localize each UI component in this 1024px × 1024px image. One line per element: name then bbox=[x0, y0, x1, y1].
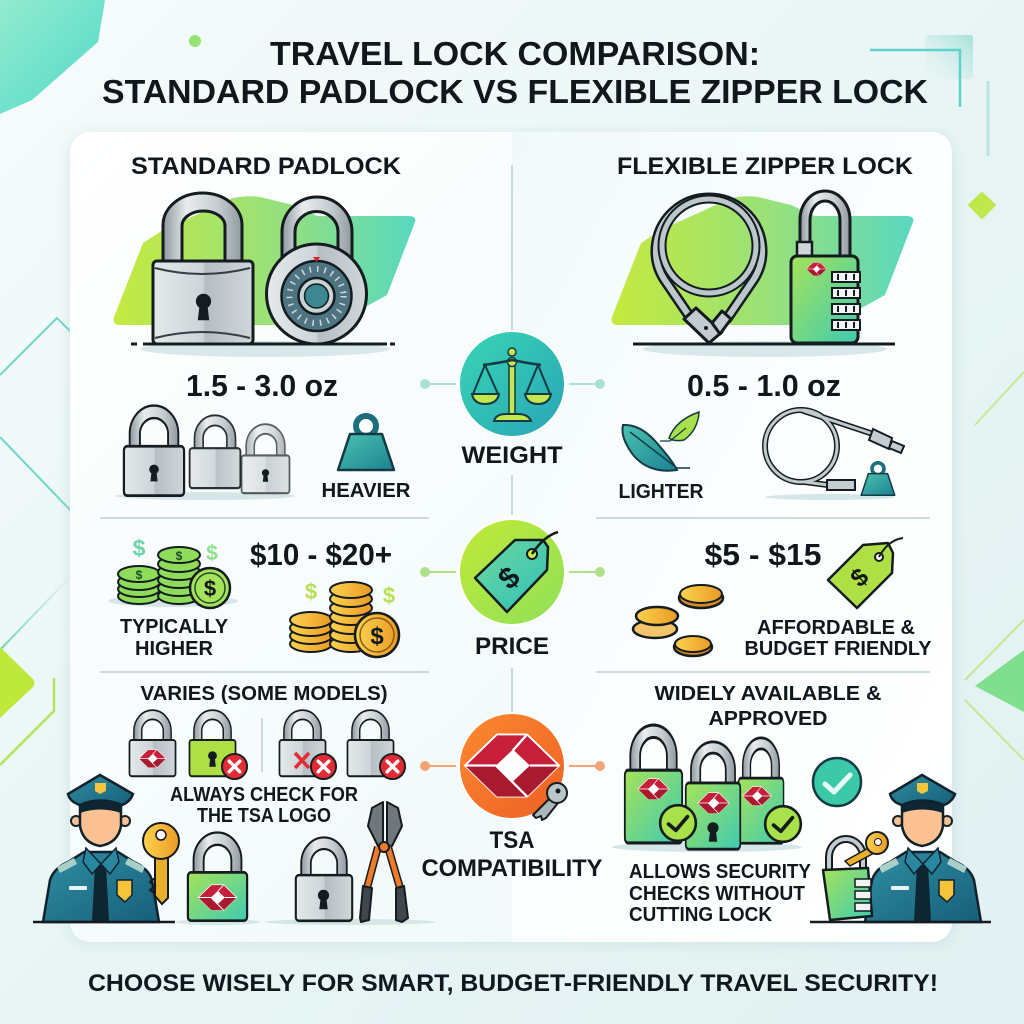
label: widely available and approved: WIDELY AVAILABLE & bbox=[654, 683, 882, 705]
title: STANDARD PADLOCK VS FLEXIBLE ZIPPER LOCK bbox=[102, 73, 928, 110]
icon: approved check bbox=[813, 758, 861, 806]
icon: gold coin stack: $ bbox=[383, 583, 395, 608]
title: TRAVEL LOCK COMPARISON: bbox=[270, 35, 760, 72]
icon: heavy weight bbox=[338, 416, 394, 470]
icon: group of heavy padlocks bbox=[115, 406, 295, 500]
label: heavier: HEAVIER bbox=[322, 480, 411, 502]
ground line right bbox=[810, 921, 991, 923]
text: allows security checks: ALLOWS SECURITY bbox=[629, 861, 812, 883]
label: widely available and approved: APPROVED bbox=[708, 708, 828, 730]
icon: bolt cutters bbox=[360, 802, 408, 922]
label: typically higher: HIGHER bbox=[135, 638, 214, 660]
label: affordable and budget friendly bbox=[744, 617, 932, 660]
icon: green money stack: $ bbox=[136, 568, 143, 582]
weight value: flexible: 0.5 - 1.0 oz bbox=[687, 368, 841, 403]
illustration: officer left bbox=[43, 775, 159, 922]
icon: green money stack: $ bbox=[206, 542, 218, 565]
icon: silver lock bbox=[265, 837, 435, 925]
text: always check for the TSA logo: ALWAYS CHECK FOR bbox=[170, 784, 359, 806]
label: TSA compatibility bbox=[422, 827, 602, 882]
text: allows security checks: CHECKS WITHOUT bbox=[629, 883, 805, 905]
icon: feather and leaf bbox=[622, 412, 699, 471]
label: typically higher bbox=[120, 616, 229, 660]
icon: green money stack: $ bbox=[176, 549, 183, 563]
price value: standard: $10 - $20+ bbox=[250, 537, 392, 572]
connector: TSA bbox=[420, 761, 605, 771]
connector: weight bbox=[420, 379, 605, 389]
icon: weight scale badge bbox=[459, 331, 565, 437]
icon: green price tag: $ bbox=[845, 563, 874, 593]
label: widely available and approved bbox=[654, 683, 882, 730]
icon: TSA logo badge bbox=[459, 713, 567, 820]
text: always check for the TSA logo: THE TSA LOGO bbox=[197, 805, 331, 827]
label: affordable and budget friendly: AFFORDABLE & bbox=[757, 617, 915, 639]
icons: TSA approved locks bbox=[612, 725, 802, 852]
illustration: cable lock and combination lock bbox=[612, 191, 913, 357]
icon: green money stack: $ bbox=[204, 576, 216, 601]
icon: gold key bbox=[143, 823, 179, 904]
icon: TSA green lock bbox=[176, 833, 260, 925]
panel: comparison card bbox=[68, 132, 954, 944]
text: allows security checks bbox=[629, 861, 812, 926]
icon: green price tag bbox=[828, 538, 903, 608]
icon: green money stack bbox=[108, 535, 238, 608]
label: varies: VARIES (SOME MODELS) bbox=[140, 683, 388, 705]
illustration: officer right bbox=[865, 775, 981, 922]
icon: combination lock with key bbox=[823, 832, 888, 920]
icons: locks without TSA approval bbox=[129, 710, 405, 779]
text: always check for the TSA logo bbox=[170, 784, 359, 827]
icon: price tag badge bbox=[459, 519, 565, 625]
title bbox=[102, 35, 928, 110]
price value: flexible: $5 - $15 bbox=[704, 537, 822, 572]
label: weight: WEIGHT bbox=[462, 442, 563, 469]
icon: price tag badge: $ bbox=[492, 560, 527, 596]
label: lighter: LIGHTER bbox=[618, 481, 704, 503]
label: price: PRICE bbox=[475, 633, 549, 660]
decorative corner and edge shapes bbox=[0, 0, 1024, 765]
illustration: standard padlocks bbox=[114, 193, 415, 357]
label: typically higher: TYPICALLY bbox=[120, 616, 229, 638]
label: TSA compatibility: TSA bbox=[490, 827, 534, 854]
label: TSA compatibility: COMPATIBILITY bbox=[422, 855, 602, 882]
weight value: standard: 1.5 - 3.0 oz bbox=[186, 368, 338, 403]
text: allows security checks: CUTTING LOCK bbox=[629, 904, 773, 926]
icon: gold coin stack bbox=[290, 579, 399, 657]
icon: gold coin stack: $ bbox=[370, 623, 384, 650]
footer tagline: CHOOSE WISELY FOR SMART, BUDGET-FRIENDLY TRAVEL SECURITY! bbox=[88, 970, 938, 997]
connector: price bbox=[420, 567, 605, 577]
ground line left bbox=[33, 921, 175, 923]
icon: thin cable bbox=[765, 410, 904, 500]
heading: standard padlock: STANDARD PADLOCK bbox=[131, 153, 402, 180]
icon: gold coin stack: $ bbox=[305, 579, 317, 604]
label: affordable and budget friendly: BUDGET FRIENDLY bbox=[744, 638, 932, 660]
heading: flexible zipper lock: FLEXIBLE ZIPPER LOCK bbox=[617, 153, 914, 180]
icon: green money stack: $ bbox=[133, 535, 146, 561]
icon: small gold coins bbox=[633, 585, 723, 656]
